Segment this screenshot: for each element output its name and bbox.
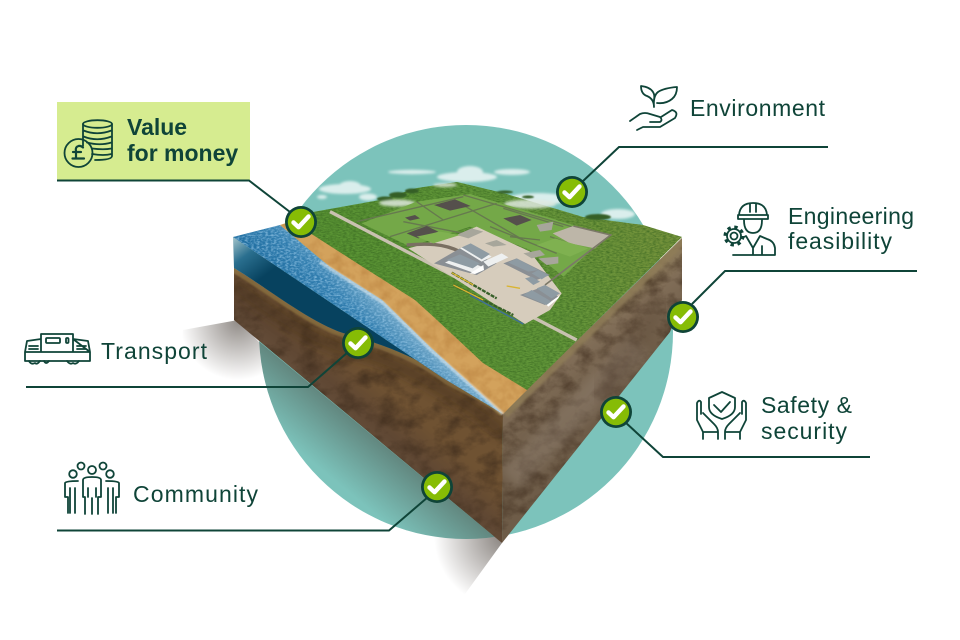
check marker: value for money [285, 206, 317, 238]
leader line [26, 352, 348, 387]
label: Transport [101, 338, 208, 364]
leader line [582, 147, 828, 182]
leader line [57, 497, 428, 530]
dark entry road [407, 244, 460, 252]
shadows under buildings [434, 248, 558, 305]
right soil face [500, 235, 685, 545]
callout: value for money [57, 102, 290, 212]
icon: coins and pound [64, 120, 112, 167]
surf line [320, 262, 503, 414]
sea surface [233, 225, 503, 414]
treeline [377, 188, 611, 220]
check marker: safety and security [600, 396, 632, 428]
icon: train [25, 334, 90, 364]
left soil face [230, 260, 510, 550]
access road [330, 212, 577, 340]
grass surface [310, 182, 682, 390]
sand beach [280, 213, 527, 414]
cast shadow on the circle [259, 342, 494, 539]
site grass compound [362, 194, 607, 277]
power station site [330, 194, 611, 340]
leader line [625, 422, 870, 457]
callout: environment [582, 86, 828, 182]
label second line: feasibility [788, 228, 892, 254]
check marker: community [421, 471, 453, 503]
label second line: security [761, 418, 848, 444]
grey pad upper right [553, 226, 611, 248]
check marker: environment [556, 176, 588, 208]
low mist [379, 183, 556, 208]
water cross-section [233, 237, 447, 380]
clouds behind the land [317, 166, 635, 219]
check marker: transport [342, 327, 374, 359]
stacked equipment rows [452, 273, 513, 315]
highlighted label background [57, 102, 250, 180]
corner shadow bottom [360, 470, 502, 612]
label: Environment [690, 95, 826, 121]
leader line [692, 271, 917, 304]
icon: hand and seedling [630, 86, 677, 130]
main halls [445, 244, 508, 273]
callout: safety and security [625, 392, 870, 457]
corner shadow left [180, 320, 300, 385]
label: Engineering [788, 203, 914, 229]
small sheds [457, 222, 558, 265]
icon: hands and shield [697, 392, 746, 439]
icon: group of people [65, 462, 119, 514]
check marker: engineering feasibility [667, 301, 699, 333]
isometric ground block [230, 182, 685, 550]
icon: engineer with hard hat and gear [725, 203, 775, 255]
dark treatment pads [405, 199, 532, 238]
green lawn patches [417, 232, 588, 257]
concrete yard [408, 227, 562, 324]
heading second line: for money [127, 140, 238, 166]
label: Safety & [761, 392, 852, 418]
callout: engineering feasibility [692, 203, 917, 304]
background circle [259, 125, 673, 539]
internal tracks [357, 195, 600, 253]
heading: Value [127, 114, 187, 140]
leader line [57, 180, 290, 212]
callout: community [57, 462, 428, 530]
callout: transport [25, 334, 348, 387]
label: Community [133, 481, 258, 507]
site perimeter road [545, 226, 611, 285]
